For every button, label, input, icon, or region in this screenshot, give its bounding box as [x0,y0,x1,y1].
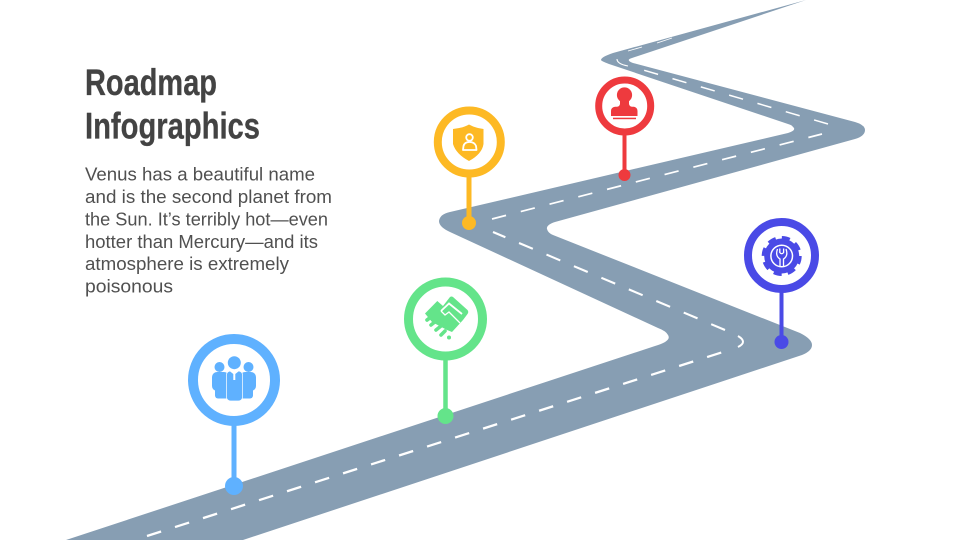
description text: poisonous [85,276,173,296]
pin: handshake (green) [408,282,482,424]
icon: shield with person [453,124,484,161]
description text: atmosphere is extremely [85,253,290,274]
title [85,62,260,146]
description text: Venus has a beautiful name [85,164,315,184]
road centre dashes [147,38,828,536]
pin: shield (yellow) [438,110,501,230]
pin: team (blue) [193,339,275,495]
title: Roadmap [85,62,217,103]
icon: handshake [425,296,468,340]
pin: stamp (red) [599,80,651,181]
description text [85,164,332,296]
description text: the Sun. It’s terribly hot—even [85,208,328,230]
title: Infographics [85,106,260,146]
description text: hotter than Mercury—and its [85,231,318,252]
icon: rubber stamp [611,87,638,119]
pin: gear (indigo) [748,222,815,349]
description text: and is the second planet from [85,186,332,207]
icon: gear with wrench [764,238,800,274]
icon: team of people [212,356,256,401]
